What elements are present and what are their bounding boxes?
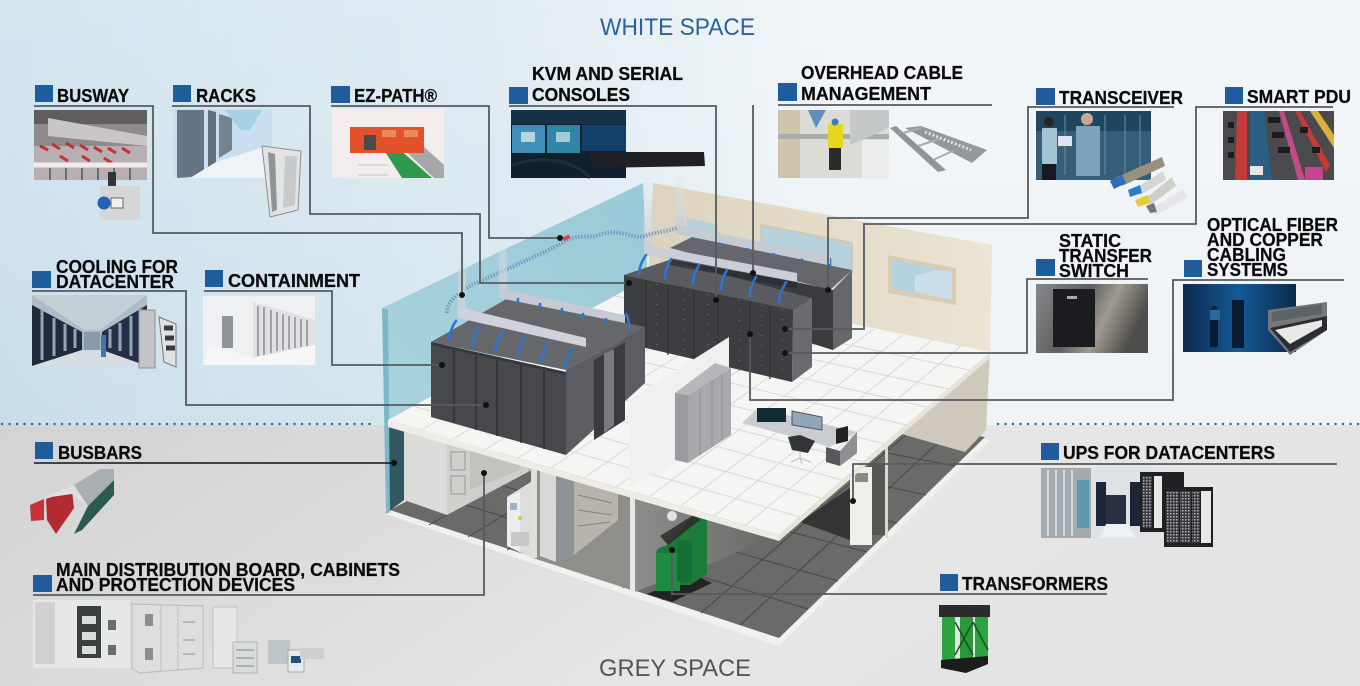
connector dot (713, 297, 719, 303)
label: BUSWAY (57, 86, 129, 106)
item: RACKS (172, 85, 632, 286)
square marker (173, 85, 191, 102)
thumbnail: rack aisle photo (173, 109, 272, 178)
front rack face with doors (431, 342, 566, 455)
overhead tray: rear (676, 172, 830, 264)
thumbnail: rack cabinet (262, 146, 301, 217)
thumbnail: PDU photo (1223, 111, 1334, 180)
square marker (205, 270, 223, 287)
icon: computer tower (836, 426, 848, 444)
connector dot (483, 402, 489, 408)
connector (853, 464, 1337, 501)
item: CONTAINMENT (203, 270, 445, 368)
label: BUSBARS (58, 443, 142, 463)
thumbnail: busway photo (34, 110, 147, 180)
overhead tray: middle (644, 172, 797, 289)
square marker (940, 574, 958, 591)
icon: monitors (757, 408, 822, 430)
item: SMART PDU (782, 87, 1351, 332)
lower room 2: distribution panels (533, 470, 631, 590)
raised floor with white tiles (388, 282, 990, 541)
thumbnail: busbar trunk (30, 469, 114, 534)
thumbnail: protection devices (268, 640, 324, 672)
item: BUSWAY (34, 85, 465, 298)
connector dot (391, 460, 397, 466)
lower room 3: back wall and dark rack (634, 488, 850, 592)
square marker (35, 85, 53, 102)
grey lockers (675, 363, 731, 463)
operator desk (742, 408, 857, 466)
label: line 2: TRANSFER (1059, 246, 1152, 266)
item: TRANSCEIVER (825, 88, 1187, 293)
divider: dotted line right (998, 423, 1360, 425)
square marker (33, 575, 52, 592)
square marker (1184, 260, 1202, 277)
connector dot (850, 498, 856, 504)
thumbnail: UPS units (1140, 472, 1213, 547)
label: line 1: STATIC (1059, 231, 1121, 251)
item: MAIN DISTRIBUTION BOARD, CABINETS AND PROTECTION DEVICES (33, 470, 487, 673)
label: line 4: SYSTEMS (1207, 260, 1288, 280)
lower level: ground plate and dark tiled floor (385, 380, 990, 646)
label: TRANSCEIVER (1059, 88, 1183, 108)
thumbnail: switchgear line-up (33, 600, 130, 668)
label: UPS FOR DATACENTERS (1063, 443, 1275, 463)
thumbnail: KVM rack unit (590, 152, 705, 168)
thumbnail: cooling unit (139, 310, 155, 368)
label: line 3: CABLING (1207, 245, 1286, 265)
label: line 1: OPTICAL FIBER (1207, 215, 1338, 235)
square marker (331, 86, 350, 103)
square marker (35, 442, 53, 459)
connector (331, 106, 560, 238)
label: EZ-PATH® (354, 86, 437, 106)
overhead tray: front (458, 240, 586, 347)
heading: grey space: GREY SPACE (599, 655, 751, 682)
label: line 1: MAIN DISTRIBUTION BOARD, CABINETS (56, 560, 400, 580)
connector dot (626, 280, 632, 286)
item: UPS FOR DATACENTERS (850, 443, 1337, 547)
item: OVERHEAD CABLE MANAGEMENT (750, 63, 992, 276)
connector (750, 280, 1344, 400)
connector dot (669, 547, 675, 553)
connector (204, 291, 442, 365)
square marker (509, 87, 528, 104)
thumbnail: control room photo (511, 110, 626, 178)
data center isometric cutaway (382, 172, 992, 646)
connector (785, 279, 1148, 353)
connector dot (825, 287, 831, 293)
label: line 1: OVERHEAD CABLE (801, 63, 963, 83)
item: COOLING FOR DATACENTER (32, 257, 489, 408)
partition walls between lower rooms (531, 445, 888, 592)
connector (172, 106, 629, 283)
thumbnail: server room photo (1183, 284, 1296, 352)
connector dot (782, 326, 788, 332)
label: line 1: KVM AND SERIAL (532, 64, 683, 84)
lower room 3: green cast resin transformer (647, 508, 712, 602)
lower right room: beige wall (888, 352, 990, 452)
thumbnail: UPS room photo (1041, 468, 1155, 538)
connector (828, 107, 1174, 290)
lower right: white power cabinet (850, 463, 886, 545)
left wall (teal) (382, 183, 648, 514)
thumbnail: STS photo (1036, 284, 1148, 353)
overhead tray: rear left (499, 240, 625, 323)
item: STATIC TRANSFER SWITCH (782, 231, 1152, 356)
blue cable dots: rear left row (518, 299, 629, 328)
thumbnail: distribution cabinets (213, 607, 257, 673)
label: RACKS (196, 86, 256, 106)
square marker (1036, 259, 1055, 276)
connector dot (747, 331, 753, 337)
label: line 2: MANAGEMENT (801, 84, 931, 104)
connector dot (439, 362, 445, 368)
label: TRANSFORMERS (962, 574, 1108, 594)
middle rack row (624, 260, 812, 382)
thumbnail: engineers photo (1036, 111, 1151, 180)
thumbnail: tap-off box (98, 172, 140, 220)
white partition wall (629, 337, 729, 488)
lower room 1: small UPS unit (507, 482, 532, 558)
connector dot (459, 292, 465, 298)
blue power cables: middle row (639, 255, 786, 302)
thumbnail: cable tray (890, 126, 987, 172)
connector (34, 106, 462, 295)
label: line 1: COOLING FOR (56, 257, 178, 277)
connector dot (782, 350, 788, 356)
item: KVM AND SERIAL CONSOLES (509, 64, 719, 303)
back rack row (670, 232, 852, 350)
divider: dotted line left (2, 423, 372, 425)
thumbnail: power center cabinet (132, 604, 203, 673)
thumbnail: containment photo (203, 296, 315, 365)
thumbnail: cable room photo (778, 110, 889, 178)
front rack row side cabinets (431, 297, 645, 455)
connector (32, 291, 486, 405)
thumbnail: SFP modules (1110, 157, 1187, 215)
label: line 2: AND COPPER (1207, 230, 1323, 250)
label: CONTAINMENT (228, 271, 360, 291)
square marker (1036, 88, 1055, 105)
blue power cables: front row (449, 321, 572, 368)
label: SMART PDU (1247, 87, 1351, 107)
thumbnail: cooling aisle photo (32, 295, 147, 366)
thumbnail: EZ-Path photo (332, 109, 444, 178)
red fire barrier on fiber path (562, 234, 570, 241)
square marker (32, 271, 51, 288)
square marker (1225, 87, 1243, 104)
label: line 2: AND PROTECTION DEVICES (56, 575, 295, 595)
label: line 3: SWITCH (1059, 261, 1129, 281)
item: BUSBARS (30, 442, 397, 534)
item: OPTICAL FIBER AND COPPER CABLING SYSTEMS (747, 215, 1344, 400)
thumbnail: transformer (939, 605, 990, 673)
connector (33, 473, 484, 595)
connector (509, 106, 716, 300)
label: line 2: DATACENTER (56, 272, 174, 292)
item: EZ-PATH (331, 86, 563, 241)
heading: white space: WHITE SPACE (600, 14, 755, 41)
thumbnail: patch panel (1268, 302, 1327, 355)
square marker (778, 83, 797, 101)
item: TRANSFORMERS (669, 547, 1108, 673)
fiber bundle along left wall (447, 228, 677, 313)
square marker (1041, 443, 1059, 460)
connector dot (481, 470, 487, 476)
thumbnail: cooling panel (159, 317, 176, 367)
label: line 2: CONSOLES (532, 85, 630, 105)
connector (34, 462, 394, 464)
lower room 1: switchboard cabinets (388, 425, 532, 515)
connector dot (750, 270, 756, 276)
connector (785, 107, 1333, 329)
connector (753, 105, 992, 273)
back wall (beige) with windows (648, 183, 992, 352)
connector (672, 550, 1107, 594)
icon: chair (788, 435, 815, 464)
connector dot (557, 235, 563, 241)
